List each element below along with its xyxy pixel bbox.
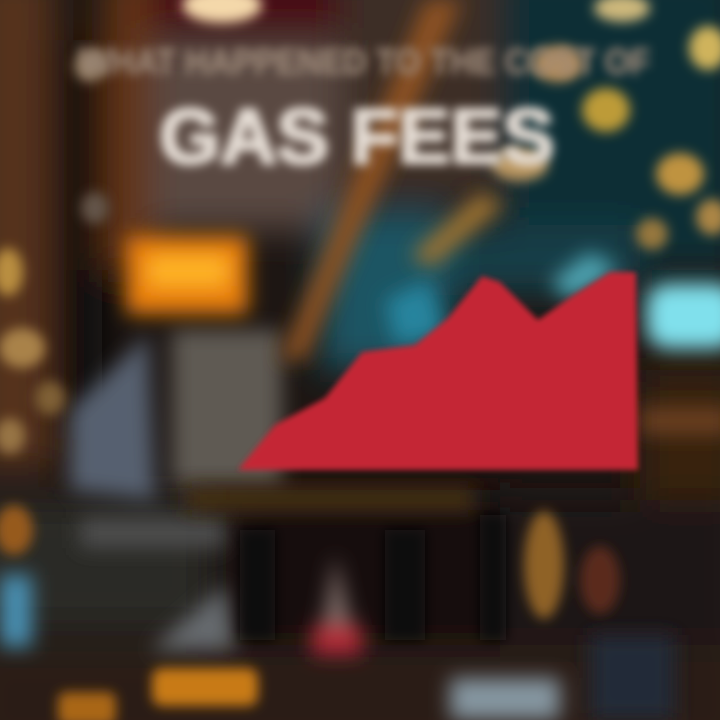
grey and blue panels xyxy=(0,330,675,720)
cyan glow xyxy=(385,252,720,349)
title main: GAS FEES xyxy=(160,92,554,180)
title xyxy=(80,41,650,180)
bright orange sign xyxy=(126,236,248,314)
red area chart xyxy=(238,272,638,470)
dark stripes at the bottom xyxy=(240,515,506,640)
title kicker: WHAT HAPPENED TO THE COST OF xyxy=(80,41,650,82)
diagonal orange beams xyxy=(185,0,720,510)
